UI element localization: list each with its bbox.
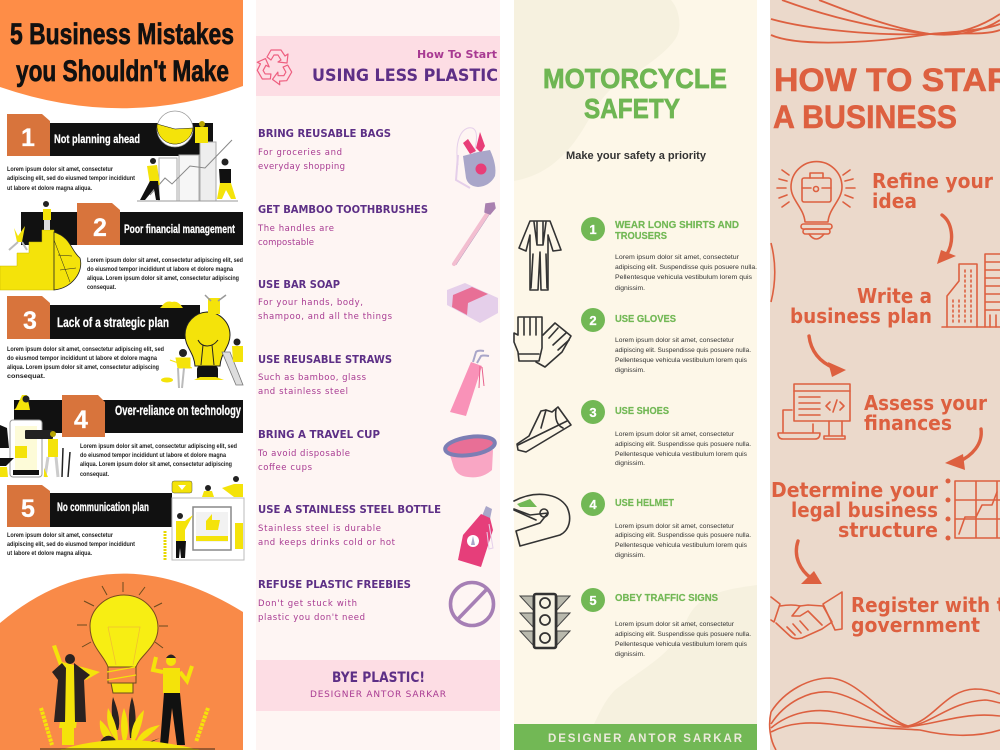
panel: 5 business mistakes xyxy=(0,0,244,750)
mistake 2 xyxy=(21,203,243,291)
footer band: DESIGNER ANTOR SARKAR xyxy=(310,690,446,700)
step 2: dignissim. xyxy=(615,368,645,374)
icon: big bulb xyxy=(77,582,168,693)
step 2: USE GLOVES xyxy=(615,314,676,325)
mistake 4: 4 xyxy=(74,406,88,434)
step 4 xyxy=(581,492,751,559)
mistake 1: Not planning ahead xyxy=(54,132,140,146)
step: assess your finances xyxy=(864,391,987,435)
arrow 2 xyxy=(809,336,846,377)
mistake 5: Lorem ipsum dolor sit amet, consectetur xyxy=(7,532,113,539)
mistake 3: Lack of a strategic plan xyxy=(57,314,169,330)
tip: toothbrushes: The handles are xyxy=(257,224,334,234)
mistake 3 xyxy=(7,296,200,380)
tip: plastic freebies: REFUSE PLASTIC FREEBIES xyxy=(258,578,411,591)
footer bar: DESIGNER ANTOR SARKAR xyxy=(548,733,743,745)
step 1: Lorem ipsum dolor sit amet, consectetur xyxy=(615,255,739,261)
icon: bulb with briefcase xyxy=(777,162,855,239)
mistake 3: do eiusmod tempor incididunt ut labore et dolore magna xyxy=(7,355,157,362)
step 2: 2 xyxy=(589,313,597,328)
tip: plastic freebies: Don't get stuck with xyxy=(258,599,357,609)
step 4: adipiscing elit. Suspendisse quis posuere nulla. xyxy=(615,533,751,539)
top waves xyxy=(771,0,1000,43)
mistake 5: ut labore et dolore magna aliqua. xyxy=(7,550,92,557)
icon: chart grid xyxy=(946,478,1000,540)
plants xyxy=(40,697,215,750)
step 4: Lorem ipsum dolor sit amet, consectetur xyxy=(615,524,734,530)
icon: shoe xyxy=(517,407,571,452)
background blobs xyxy=(514,0,679,181)
title: MOTORCYCLE xyxy=(543,63,727,94)
step 3: adipiscing elit. Suspendisse quis posuere nulla. xyxy=(615,442,751,448)
mistake 1: adipiscing elit, sed do eiusmed tempor incididunt xyxy=(7,175,136,182)
arrow 3 xyxy=(945,429,981,470)
mistake 5: adipiscing elit, sed do eiusmod tempor incididunt xyxy=(7,541,136,548)
title: SAFETY xyxy=(584,93,680,124)
icon: travel cup xyxy=(444,434,496,477)
step 5: Lorem ipsum dolor sit amet, consectetur xyxy=(615,622,734,628)
icon: soap xyxy=(447,283,498,323)
step: legal business structure: Determine your xyxy=(771,478,938,502)
step 2: Pellentesque vehicula vestibulum lorem quis xyxy=(615,358,747,364)
step: assess your finances: finances xyxy=(864,411,952,435)
mistake 5 xyxy=(7,485,172,557)
title xyxy=(312,48,498,86)
step 5: 5 xyxy=(589,593,597,608)
tip: steel bottle: Stainless steel is durable xyxy=(258,524,381,534)
mistake 5: No communication plan xyxy=(57,502,149,514)
icon: handshake xyxy=(771,592,842,639)
title xyxy=(10,18,234,88)
mistake 5: 5 xyxy=(21,495,35,523)
step: write a business plan: Write a xyxy=(857,284,932,308)
footer bar xyxy=(514,724,757,750)
illustration: chart and workers xyxy=(137,111,238,201)
step 4: dignissim. xyxy=(615,553,645,559)
icon: traffic light xyxy=(520,594,570,648)
mistake 4: do eiusmod tempor incididunt ut labore et dolore magna xyxy=(80,452,226,459)
mistake 4: Lorem ipsum dolor sit amet, consectetur adipiscing elit, sed xyxy=(80,443,237,450)
step 5: dignissim. xyxy=(615,652,645,658)
step 4: Pellentesque vehicula vestibulum lorem quis xyxy=(615,543,747,549)
step: refine your idea xyxy=(872,169,993,213)
panel: using less plastic xyxy=(254,0,500,750)
tip: toothbrushes: compostable xyxy=(258,238,314,248)
tip: toothbrushes: GET BAMBOO TOOTHBRUSHES xyxy=(258,203,428,216)
tip: travel cup xyxy=(257,428,380,473)
step 4: 4 xyxy=(589,497,597,512)
icon: buildings xyxy=(942,254,1000,327)
mistake 1 xyxy=(7,114,213,192)
step 5: OBEY TRAFFIC SIGNS xyxy=(615,593,718,604)
tip: reusable straws: Such as bamboo, glass xyxy=(258,373,367,383)
tip: steel bottle: USE A STAINLESS STEEL BOTTLE xyxy=(258,503,441,516)
mistake 3: aliqua. Lorem ipsum dolor sit amet, consectetur adipiscing xyxy=(7,364,159,371)
header band xyxy=(256,36,500,96)
mistake 2: consequat. xyxy=(87,284,116,291)
arrow 1 xyxy=(937,215,956,264)
mistake 2: Lorem ipsum dolor sit amet, consectetur adipiscing elit, sed xyxy=(87,257,243,264)
icon: computer and laptop xyxy=(778,384,850,439)
step 1: dignissim. xyxy=(615,286,645,292)
step 2 xyxy=(581,308,751,374)
step: assess your finances: Assess your xyxy=(864,391,987,415)
icon: toothbrush xyxy=(454,203,495,265)
mistake 2: Poor financial management xyxy=(124,224,235,236)
tip: bar soap: For your hands, body, xyxy=(258,298,363,308)
tip: toothbrushes xyxy=(257,203,428,248)
illustration: stairs and leaf xyxy=(0,201,81,290)
mistake 2: do eiusmod tempor incididunt ut labore et dolore magna xyxy=(87,266,233,273)
step: legal business structure: legal business xyxy=(791,498,938,522)
step 4: USE HELMET xyxy=(615,498,674,509)
title: you Shouldn't Make xyxy=(16,55,229,88)
title: 5 Business Mistakes xyxy=(10,18,234,51)
title xyxy=(773,62,1000,135)
step: refine your idea: Refine your xyxy=(872,169,993,193)
tip: reusable straws xyxy=(258,353,392,397)
step 1: Pellentesque vehicula vestibulum lorem quis xyxy=(615,275,752,281)
step 5 xyxy=(581,588,751,658)
panel: how to start a business xyxy=(770,0,1000,750)
mistake 3: 3 xyxy=(23,307,37,335)
tip: travel cup: BRING A TRAVEL CUP xyxy=(258,428,380,441)
icon: gloves xyxy=(514,317,571,367)
mistake 1: ut labore et dolore magna aliqua. xyxy=(7,185,92,192)
step: refine your idea: idea xyxy=(872,189,917,213)
bottom waves xyxy=(770,678,1000,750)
step 3: Pellentesque vehicula vestibulum lorem quis xyxy=(615,452,747,458)
header background xyxy=(0,0,243,108)
mistake 4: Over-reliance on technology xyxy=(115,402,241,418)
person: man xyxy=(153,654,192,745)
step 5: Pellentesque vehicula vestibulum lorem quis xyxy=(615,642,747,648)
step 3 xyxy=(581,400,751,467)
step 3: dignissim. xyxy=(615,461,645,467)
step 1: 1 xyxy=(589,222,597,237)
step 3: Lorem ipsum dolor sit amet, consectetur xyxy=(615,432,734,438)
step: write a business plan xyxy=(790,284,932,328)
footer band: BYE PLASTIC! xyxy=(332,670,425,686)
step 2: Lorem ipsum dolor sit amet, consectetur xyxy=(615,338,734,344)
tip: steel bottle xyxy=(258,503,441,548)
panel: motorcycle safety xyxy=(514,0,757,750)
step 1: WEAR LONG SHIRTS AND xyxy=(615,220,739,231)
tip: reusable bags: everyday shopping xyxy=(258,162,345,172)
step 2: adipiscing elit. Suspendisse quis posuere nulla. xyxy=(615,348,751,354)
illustration: phone and users xyxy=(0,395,70,477)
person: woman xyxy=(52,645,100,745)
step 1: TROUSERS xyxy=(615,231,667,242)
subtitle: Make your safety a priority xyxy=(566,150,707,162)
icon: recycle xyxy=(254,50,294,87)
mistake 4: aliqua. Lorem ipsum dolor sit amet, consectetur adipiscing xyxy=(80,461,232,468)
illustration: light bulb and team xyxy=(160,295,243,388)
step 1: adipiscing elit. Suspendisse quis posuere nulla. xyxy=(615,265,757,271)
icon: helmet xyxy=(514,494,570,546)
tip: reusable straws: USE REUSABLE STRAWS xyxy=(258,353,392,366)
tip: reusable bags: For groceries and xyxy=(258,148,342,158)
step: register with the government xyxy=(851,593,1000,637)
title: USING LESS PLASTIC xyxy=(312,66,498,86)
mistake 1: Lorem ipsum dolor sit amet, consectetur xyxy=(7,166,113,173)
mistake 4 xyxy=(14,395,243,478)
tip: steel bottle: and keeps drinks cold or hot xyxy=(258,538,396,548)
tip: reusable bags xyxy=(258,127,391,172)
mistake 2: 2 xyxy=(93,214,107,242)
arrow 4 xyxy=(796,541,822,584)
icon: no sign xyxy=(450,582,494,626)
mistake 3: Lorem ipsum dolor sit amet, consectetur adipiscing elit, sed xyxy=(7,346,164,353)
step: register with the government: government xyxy=(851,613,980,637)
tip: travel cup: coffee cups xyxy=(258,463,313,473)
footer illustration: big light bulb xyxy=(0,574,243,750)
icon: straws xyxy=(450,351,489,416)
step 3: 3 xyxy=(589,405,597,420)
step: legal business structure: structure xyxy=(838,518,938,542)
step: legal business structure xyxy=(771,478,938,542)
icon: suit xyxy=(519,221,561,290)
step 5: adipiscing elit. Suspendisse quis posuere nulla. xyxy=(615,632,751,638)
title xyxy=(543,63,727,124)
tip: plastic freebies xyxy=(258,578,411,623)
footer band xyxy=(256,660,500,711)
icon: bottle xyxy=(458,506,493,567)
left arc xyxy=(771,243,775,302)
mistake 1: 1 xyxy=(21,124,35,152)
tip: reusable straws: and stainless steel xyxy=(258,387,348,397)
step: write a business plan: business plan xyxy=(790,304,932,328)
tip: bar soap xyxy=(258,278,393,322)
icon: bag xyxy=(456,128,495,188)
mistake 4: consequat. xyxy=(80,471,109,478)
tip: bar soap: shampoo, and all the things xyxy=(258,312,393,322)
illustration: social media board xyxy=(165,476,244,560)
step 3: USE SHOES xyxy=(615,406,669,417)
tip: reusable bags: BRING REUSABLE BAGS xyxy=(258,127,391,140)
title: How To Start xyxy=(417,48,498,61)
step 1 xyxy=(581,217,757,292)
title: A BUSINESS xyxy=(773,99,957,135)
tip: plastic freebies: plastic you don't need xyxy=(258,613,365,623)
mistake 2: aliqua. Lorem ipsum dolor sit amet, consectetur adipiscing xyxy=(87,275,239,282)
mistake 3: consequat. xyxy=(7,373,45,380)
tip: bar soap: USE BAR SOAP xyxy=(258,278,340,291)
tip: travel cup: To avoid disposable xyxy=(257,449,350,459)
